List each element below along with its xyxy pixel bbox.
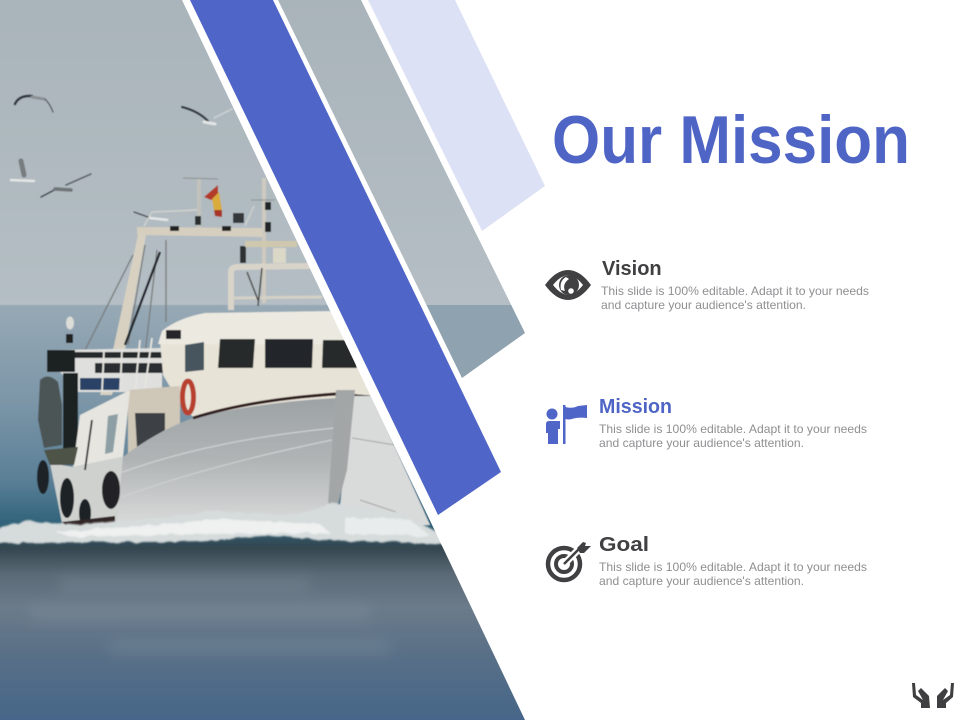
description: mission: This slide is 100% editable. Adapt it to your needs — [599, 422, 867, 436]
heading: mission: Mission — [599, 396, 672, 418]
upper frame — [231, 266, 312, 310]
boat — [37, 178, 430, 530]
gull on post — [66, 316, 74, 330]
icon: person with flag — [546, 405, 587, 444]
windows — [185, 342, 204, 372]
stern post — [63, 373, 78, 465]
photo strip between bars — [278, 0, 525, 378]
description: vision: This slide is 100% editable. Adapt it to your needs — [601, 284, 869, 298]
rear deck — [60, 348, 162, 392]
heading: goal: Goal — [599, 534, 649, 556]
gantry leg — [100, 235, 146, 395]
description: vision: and capture your audience's attention. — [601, 298, 806, 312]
bow wake — [0, 503, 445, 545]
item: mission — [546, 396, 867, 450]
cabin roof — [158, 311, 352, 344]
stays — [84, 240, 168, 350]
item: vision — [545, 258, 869, 312]
description: goal: This slide is 100% editable. Adapt it to your needs — [599, 560, 867, 574]
diagonal bar: pale blue — [368, 0, 545, 231]
radar — [245, 241, 297, 247]
description: mission: and capture your audience's attention. — [599, 436, 804, 450]
fenders — [37, 460, 49, 494]
upper rail — [144, 206, 254, 226]
flag — [204, 185, 222, 217]
description: goal: and capture your audience's attention. — [599, 574, 804, 588]
seagulls — [11, 96, 232, 220]
rope — [44, 447, 78, 465]
sea reflections — [68, 581, 382, 652]
icon: target with arrow — [548, 542, 591, 580]
cabin body — [160, 338, 372, 417]
sky — [0, 0, 328, 306]
lifebuoy — [182, 381, 194, 413]
stern hull — [50, 457, 123, 528]
winch — [47, 350, 75, 372]
photo: fishing boat at sea — [0, 0, 540, 720]
hull ribs — [120, 428, 335, 497]
tarp — [38, 376, 62, 448]
red rail — [193, 394, 370, 418]
item: goal — [548, 534, 867, 588]
mast — [262, 178, 266, 303]
stern white panel — [73, 390, 130, 467]
stern cream section — [128, 386, 180, 455]
sea — [0, 305, 540, 720]
icon: open hands — [912, 683, 954, 708]
diagonal bar: blue — [190, 0, 501, 515]
gantry bar — [137, 227, 262, 237]
title: Our Mission — [552, 102, 910, 178]
heading: vision: Vision — [602, 258, 662, 280]
main hull — [117, 398, 337, 525]
stem post — [328, 390, 355, 508]
radar post — [197, 178, 201, 228]
bow side — [338, 396, 430, 525]
icon: eye — [545, 270, 591, 300]
